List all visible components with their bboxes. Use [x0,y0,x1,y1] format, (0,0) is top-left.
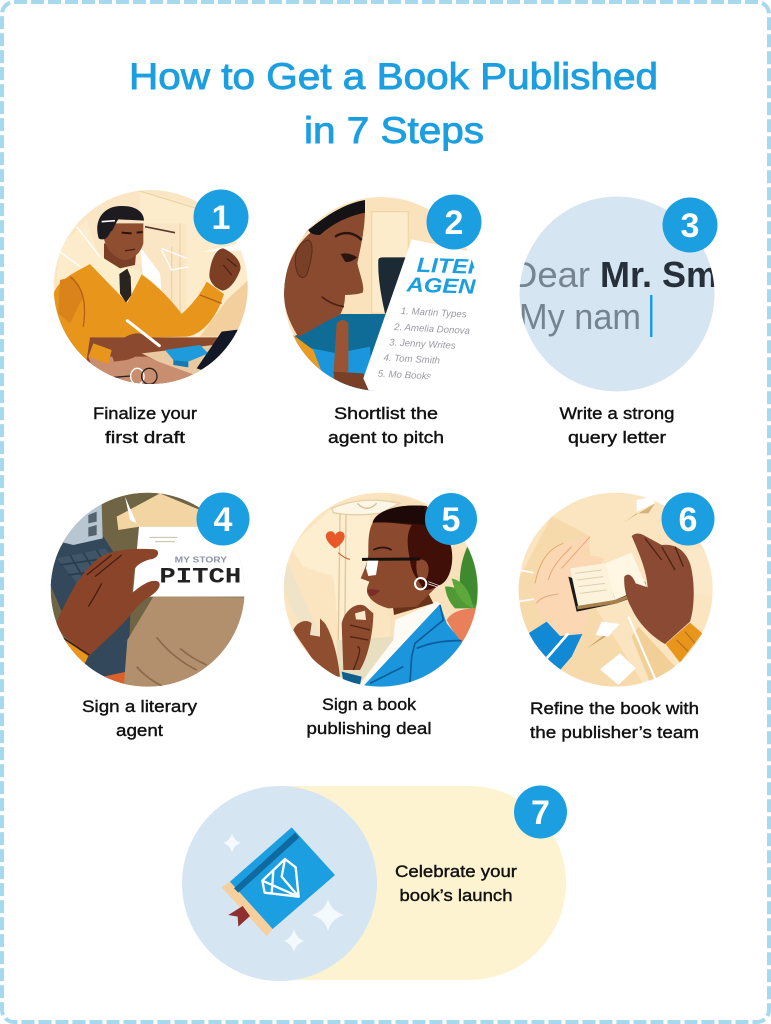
step badge 4: 4 [214,501,233,539]
white turtleneck [360,602,440,686]
list heading: LITER [416,254,485,279]
list of agents: 3. Jenny Writes [389,337,456,352]
title: How to Get a Book Published [129,56,658,97]
caption: Sign a literary [82,697,198,716]
panel: step 2 shortlist agent [283,194,494,447]
caption [530,699,699,742]
paper scraps [518,497,655,685]
paper in hand [283,560,322,637]
step badge 3: 3 [681,207,699,245]
step badge 6 [662,492,714,546]
illustration: hands with open book [518,493,713,687]
caption: first draft [105,428,185,447]
caption: Celebrate your [395,862,517,881]
step badge 6: 6 [679,501,697,539]
hair [308,200,365,235]
paper [133,527,253,597]
step badge 3 [662,198,718,252]
heart [326,531,350,559]
caption: Refine the book with [530,699,699,718]
diamond [262,859,299,897]
orange sweater [53,264,224,364]
panel: step 6 refine the book [518,492,714,742]
lamp [332,500,400,515]
face and head [284,210,365,337]
title: in 7 Steps [304,110,484,151]
necktie [119,269,131,303]
caption: publishing deal [306,719,432,738]
blue shirt [293,314,387,393]
caption: Write a strong [560,404,674,423]
illustration: woman considering deal [283,493,480,693]
caption: Finalize your [93,404,197,423]
tan folder [124,596,244,687]
step badge 7: 7 [531,794,550,832]
shirt collar [90,264,142,302]
caption [93,404,197,447]
caption [560,404,674,447]
plant [445,547,480,643]
raised fist [209,248,241,291]
list heading [406,258,478,294]
list heading: AGENT [405,273,493,299]
desk [86,337,223,384]
caption [82,697,198,740]
neck [392,590,433,615]
illustration: typed letter: Dear [511,254,590,295]
caption: agent [116,721,163,740]
yellow pill background [280,786,566,980]
caption [395,862,517,905]
paper list [363,239,483,393]
list of agents [378,306,471,382]
blue circle [182,786,377,981]
illustration: man reading agent list [283,197,494,393]
neck and head [104,243,137,268]
illustration: typed letter: My nam [519,296,641,337]
pitch text: MY STORY [175,555,228,565]
raised finger [333,320,348,381]
illustration: hand holding pitch [48,493,253,693]
blazer [363,604,463,693]
eyeglasses [114,376,131,377]
hand on chin [342,605,373,670]
face [361,522,437,608]
hand [55,549,160,657]
icon: blue book with diamond [222,827,335,936]
computer monitor [378,257,406,314]
step badge 5: 5 [442,501,460,539]
hair [373,505,452,590]
title [129,56,658,151]
earring [415,578,426,589]
list of agents: 1. Martin Types [401,306,467,320]
step badge 4 [196,492,250,546]
step badge 2: 2 [445,204,463,242]
blue book [165,345,208,362]
illustration: man at desk [53,190,248,390]
left hand [293,618,340,677]
orange cuff [666,623,702,663]
pitch text [161,556,240,582]
caption: the publisher’s team [530,723,699,742]
caption: Sign a book [322,695,417,714]
step badge 1: 1 [212,199,230,237]
sleeve [64,640,88,664]
caption: Shortlist the [334,404,438,423]
laptop [197,329,240,372]
keyboard and papers [142,345,227,375]
step badge 5 [425,493,477,545]
illustration: typed letter [520,196,714,392]
step badge 2 [426,194,482,250]
step badge 7 [514,786,567,838]
caption: agent to pitch [328,428,444,447]
cuff [88,343,112,364]
illustration: typed letter: Mr. Smith [600,254,762,295]
laptop [48,537,132,670]
open book [568,553,648,612]
panel: step 4 sign literary agent [48,492,253,740]
list of agents: 2. Amelia Donova [393,322,471,337]
step badge 1 [194,190,248,244]
light hand [533,535,605,637]
list of agents: 5. Mo Books [378,369,432,382]
dark hand [624,534,694,644]
panel: step 7 celebrate launch [182,786,567,981]
panel: step 3 query letter [520,196,718,447]
panel: step 5 publishing deal [283,493,480,738]
writing hand [111,333,147,362]
pitch text: PITCH [159,565,241,590]
glasses [362,554,420,564]
blue sleeve [528,622,582,670]
caption [306,695,432,738]
panel: step 1 finalize first draft [53,190,249,447]
caption [328,404,444,447]
icon: sparkles [223,833,344,952]
caption: query letter [568,428,666,447]
list of agents: 4. Tom Smith [383,353,440,367]
caption: book’s launch [400,886,512,905]
